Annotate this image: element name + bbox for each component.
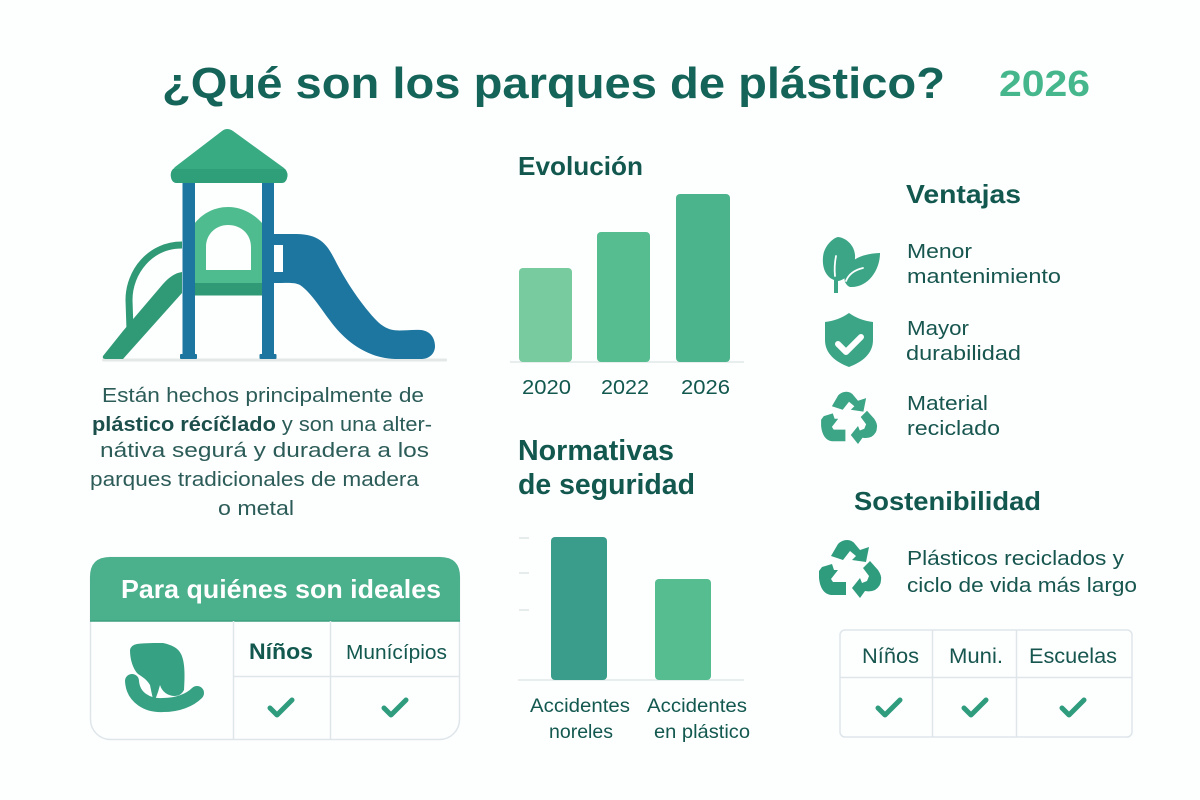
- icon: shield: [825, 313, 873, 367]
- text: Mayor durabilidad: Mayor: [907, 317, 969, 340]
- column: Niños: Níños: [249, 639, 313, 664]
- header label: Para quiénes son ideales: [121, 574, 441, 604]
- heading: Evolución: [518, 151, 643, 181]
- table: [840, 630, 1132, 737]
- table: Escuelas: [1029, 645, 1117, 668]
- chart: Normativas de seguridad: de seguridad: [518, 469, 695, 501]
- panel: Para quiénes son ideales: [90, 557, 460, 740]
- text: Material reciclado: Material: [907, 392, 988, 415]
- rail: [129, 245, 182, 330]
- description text: plástico récíčlado y son una alter-: [92, 414, 432, 436]
- icon: abstract figure: [130, 643, 197, 705]
- bar 2022: [597, 232, 650, 362]
- card outline: [90, 558, 460, 740]
- chart: Evolución: 2022: [601, 377, 649, 399]
- heading: Ventajas: [906, 179, 1021, 209]
- illustration: playground: [102, 129, 447, 362]
- column headers: Níños: [862, 645, 919, 668]
- checks: [878, 700, 900, 715]
- description text: o metal: [218, 498, 294, 520]
- platform: [195, 283, 262, 296]
- posts: [182, 183, 195, 355]
- year badge: 2026: [999, 63, 1090, 104]
- heading: Normativas: [518, 435, 674, 467]
- check 2: [384, 700, 406, 715]
- blue slide: [274, 234, 435, 359]
- table: Muni.: [949, 645, 1003, 668]
- title: ¿Qué son los parques de plástico?: [162, 59, 945, 108]
- bar labels: Accidentes: [530, 695, 630, 717]
- chart: Normativas de seguridad: Accidentes: [647, 695, 747, 717]
- bar: accidentes noreles: [551, 537, 607, 680]
- description text: [90, 385, 432, 520]
- icon: recycle: [821, 392, 877, 444]
- left slide: [103, 272, 182, 359]
- panel: Ventajas: reciclado: [907, 417, 1000, 440]
- bar 2026: [676, 194, 730, 362]
- ground shadow: [102, 358, 447, 362]
- panel: Sostenibilidad: [819, 486, 1137, 737]
- chart: Normativas de seguridad: en plástico: [654, 721, 750, 743]
- heading: Sostenibilidad: [854, 486, 1041, 516]
- bar: accidentes en plástico: [655, 579, 711, 680]
- panel: Sostenibilidad: ciclo de vida más largo: [907, 574, 1137, 597]
- tower panel: [195, 207, 262, 283]
- text: Menor mantenimiento: Menor: [907, 240, 972, 263]
- chart: Normativas de seguridad: [518, 435, 750, 743]
- text: Plásticos reciclados y: [907, 547, 1125, 570]
- icon: leaves: [823, 237, 880, 293]
- panel: Ventajas: mantenimiento: [907, 265, 1061, 288]
- bar 2020: [519, 268, 572, 362]
- check 1: [270, 700, 292, 715]
- column: Municipios: Munícípios: [346, 641, 447, 664]
- description text: nátiva segurá y duradera a los: [100, 440, 429, 462]
- axis labels: 2020: [522, 377, 571, 399]
- chart: Evolución: 2026: [681, 377, 730, 399]
- panel: Ventajas: [821, 179, 1061, 444]
- panel: Ventajas: durabilidad: [906, 342, 1021, 365]
- icon: recycle: [819, 540, 881, 598]
- description text: parques tradicionales de madera: [90, 469, 420, 491]
- roof: [171, 129, 288, 183]
- card header: [90, 557, 460, 621]
- chart: Evolución: [510, 151, 744, 399]
- chart: Normativas de seguridad: noreles: [549, 721, 613, 743]
- description text: Están hechos principalmente de: [102, 385, 424, 407]
